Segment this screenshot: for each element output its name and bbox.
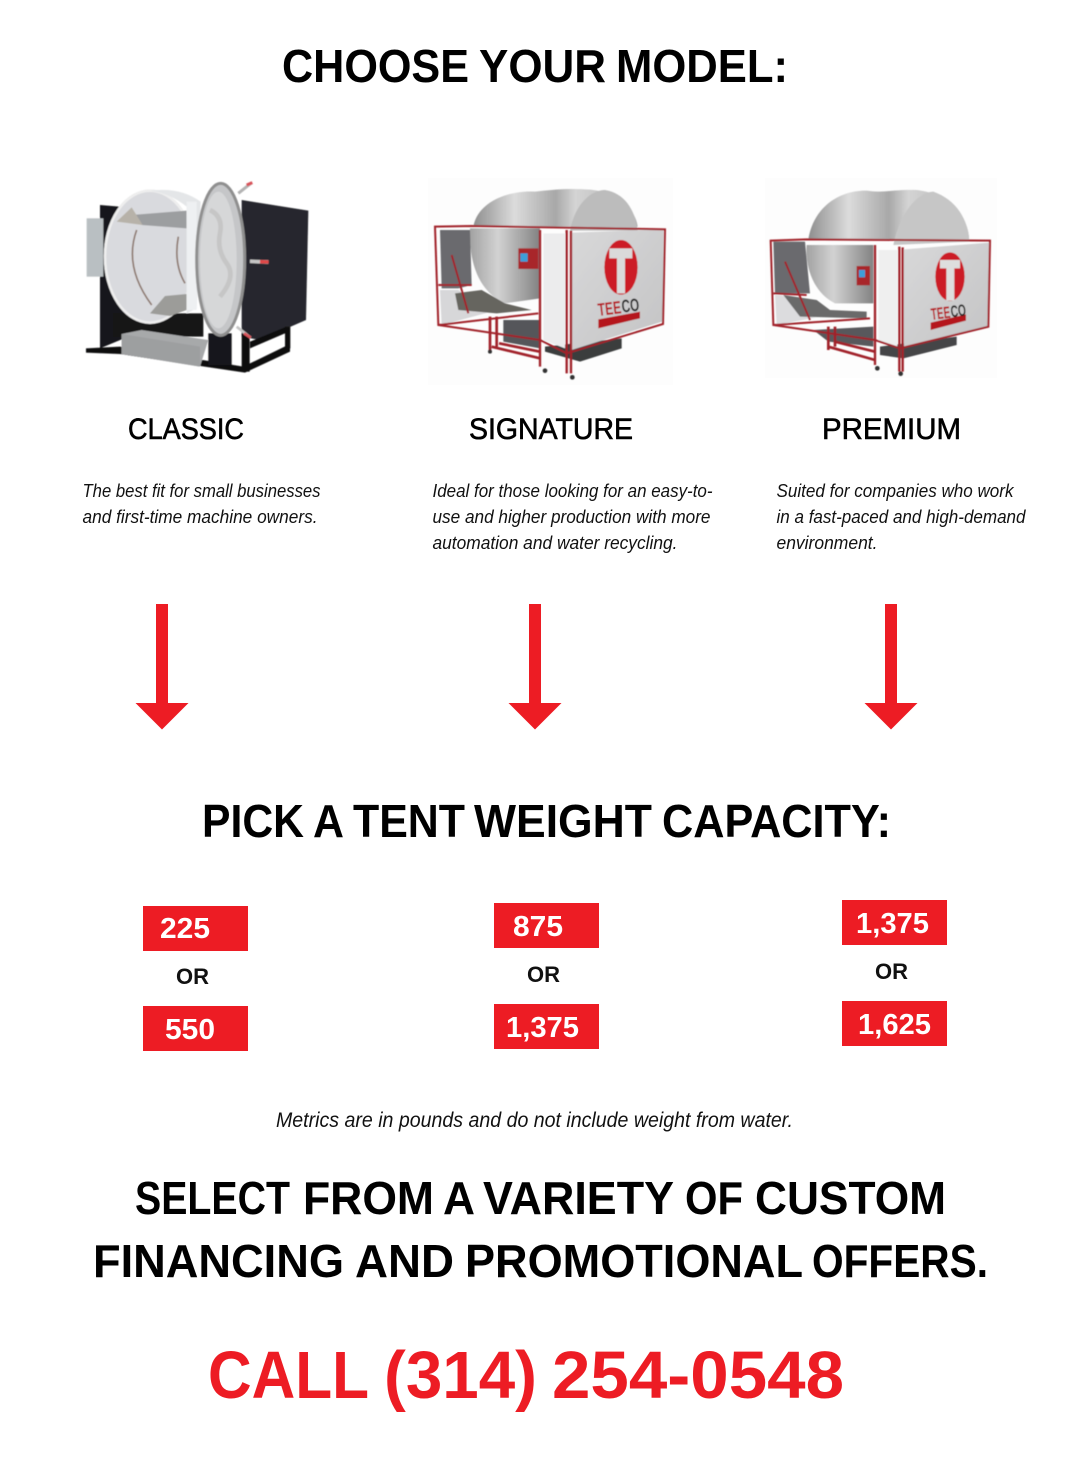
- description: premium: [776, 481, 1026, 553]
- call to action: phone number: 254-0548: [552, 1338, 844, 1413]
- arrow: premium: [864, 604, 918, 730]
- heading: pick a tent weight capacity: [202, 795, 891, 847]
- offer text: PROMOTIONAL: [465, 1235, 803, 1287]
- offer text: VARIETY: [483, 1172, 674, 1224]
- offer text: SELECT: [135, 1172, 290, 1224]
- model name: signature: SIGNATURE: [469, 413, 633, 446]
- product image: classic machine: [86, 183, 308, 373]
- title: choose your model: CHOOSE: [282, 40, 469, 92]
- call to action: phone number: CALL: [208, 1338, 369, 1413]
- product image: signature machine: [428, 178, 673, 385]
- offer text: OFFERS.: [812, 1235, 988, 1287]
- capacity options: signature: 875: [513, 911, 563, 943]
- capacity options: signature: 1,375: [506, 1012, 579, 1044]
- description: premium: environment.: [776, 533, 878, 553]
- offer text: CUSTOM: [755, 1172, 946, 1224]
- description: signature: [432, 481, 713, 553]
- heading: pick a tent weight capacity: PICK: [202, 795, 304, 847]
- description: classic: [82, 481, 320, 527]
- model name: classic: CLASSIC: [128, 413, 244, 446]
- arrow: signature: [508, 604, 562, 730]
- capacity options: premium: [842, 900, 947, 1046]
- description: signature: Ideal for those looking for an easy-to-: [432, 481, 713, 501]
- call to action: phone number: (314): [384, 1338, 537, 1413]
- product image: signature machine: TEE: [597, 297, 622, 320]
- description: classic: The best fit for small businesses: [82, 481, 320, 501]
- capacity options: classic: [143, 906, 248, 1051]
- title: choose your model: YOUR: [479, 40, 606, 92]
- heading: pick a tent weight capacity: TENT: [353, 795, 465, 847]
- description: signature: use and higher production with more: [432, 507, 710, 527]
- description: signature: automation and water recycling.: [432, 533, 678, 553]
- footnote: Metrics are in pounds and do not include weight from water.: [276, 1109, 793, 1132]
- heading: pick a tent weight capacity: A: [313, 795, 344, 847]
- offer text: FROM: [303, 1172, 434, 1224]
- title: choose your model: MODEL:: [616, 40, 788, 92]
- description: classic: and first-time machine owners.: [82, 507, 318, 527]
- product image: premium machine: TEE: [930, 303, 951, 324]
- capacity options: classic: 225: [160, 913, 210, 945]
- title: choose your model: [282, 40, 788, 92]
- offer text: FINANCING: [93, 1235, 344, 1287]
- capacity options: premium: 1,375: [856, 908, 929, 940]
- description: premium: in a fast-paced and high-demand: [776, 507, 1026, 527]
- offer text: A: [443, 1172, 475, 1224]
- product image: signature machine: CO: [620, 295, 640, 317]
- capacity options: premium: OR: [875, 959, 908, 984]
- call to action: phone number: [208, 1338, 844, 1413]
- heading: pick a tent weight capacity: CAPACITY:: [662, 795, 891, 847]
- offer text: AND: [355, 1235, 454, 1287]
- capacity options: signature: OR: [527, 962, 560, 987]
- offer text: [93, 1172, 988, 1287]
- product image: premium machine: CO: [950, 301, 967, 321]
- model name: premium: PREMIUM: [822, 413, 961, 446]
- capacity options: signature: [494, 903, 599, 1049]
- capacity options: classic: 550: [165, 1014, 215, 1046]
- capacity options: premium: 1,625: [858, 1009, 931, 1041]
- offer text: OF: [685, 1172, 743, 1224]
- description: premium: Suited for companies who work: [776, 481, 1014, 501]
- arrow: classic: [136, 604, 188, 730]
- heading: pick a tent weight capacity: WEIGHT: [474, 795, 652, 847]
- capacity options: classic: OR: [176, 964, 209, 989]
- product image: premium machine: [765, 178, 997, 378]
